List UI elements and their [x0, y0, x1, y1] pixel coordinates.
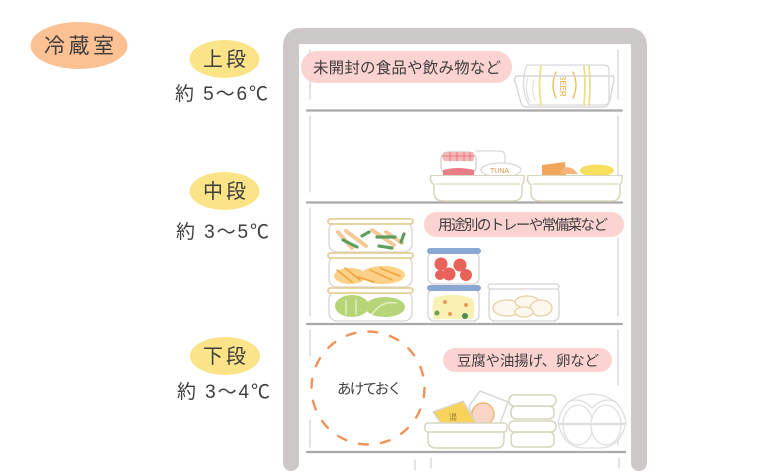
heading: 上段: 上段 [203, 48, 246, 71]
callout: middle shelf: 用途別のトレーや常備菜など [438, 217, 608, 234]
container: egg salad [427, 285, 481, 321]
text: middle temperature: 約 3～5℃ [176, 221, 269, 243]
icon: stacked containers with prepared food [328, 219, 413, 321]
container: cabbage [328, 288, 413, 321]
panel: title badge 冷蔵室: 冷蔵室 [44, 35, 114, 58]
shelves [307, 110, 625, 452]
icon: meat and tuna packs in tray: TUNA [490, 168, 509, 175]
icon: meat and tuna packs in tray [430, 151, 524, 201]
callout: lower shelf [443, 348, 612, 372]
callout: upper shelf [301, 51, 512, 83]
text: lower temperature: 約 3～4℃ [177, 381, 270, 403]
panel: refrigerator frame [291, 36, 639, 463]
icon: butter and cheese in tray [527, 162, 622, 201]
heading: 中段: 中段 [203, 180, 246, 203]
heading: 下段: 下段 [203, 345, 246, 368]
panel: middle shelf label [176, 172, 269, 243]
container: green beans and carrots [328, 219, 413, 252]
container: carrots [328, 253, 413, 287]
callout: middle shelf [424, 212, 624, 237]
icon: blue-lid containers with tomatoes and salad [427, 248, 481, 321]
icon: dashed circle 'leave empty': あけておく [337, 381, 402, 398]
icon: tofu and fried tofu packs in tray [425, 391, 508, 448]
icon: beer can in container [514, 65, 614, 107]
icon: container with sliced food [488, 284, 559, 321]
panel: lower shelf label [177, 337, 270, 403]
callout: lower shelf: 豆腐や油揚げ、卵など [457, 353, 600, 370]
icon: stacked tofu containers [509, 395, 556, 447]
container: tomatoes [427, 248, 481, 284]
callout: upper shelf: 未開封の食品や飲み物など [313, 59, 501, 77]
panel: title badge 冷蔵室 [30, 22, 128, 69]
icon: tofu and fried tofu packs in tray: 湯 [449, 412, 457, 422]
icon: beer can in container: BEER [558, 75, 567, 97]
icon: egg carton [558, 394, 626, 448]
panel: upper shelf label [175, 40, 268, 105]
icon: dashed circle 'leave empty' [312, 332, 424, 444]
text: upper temperature: 約 5～6℃ [175, 83, 268, 105]
